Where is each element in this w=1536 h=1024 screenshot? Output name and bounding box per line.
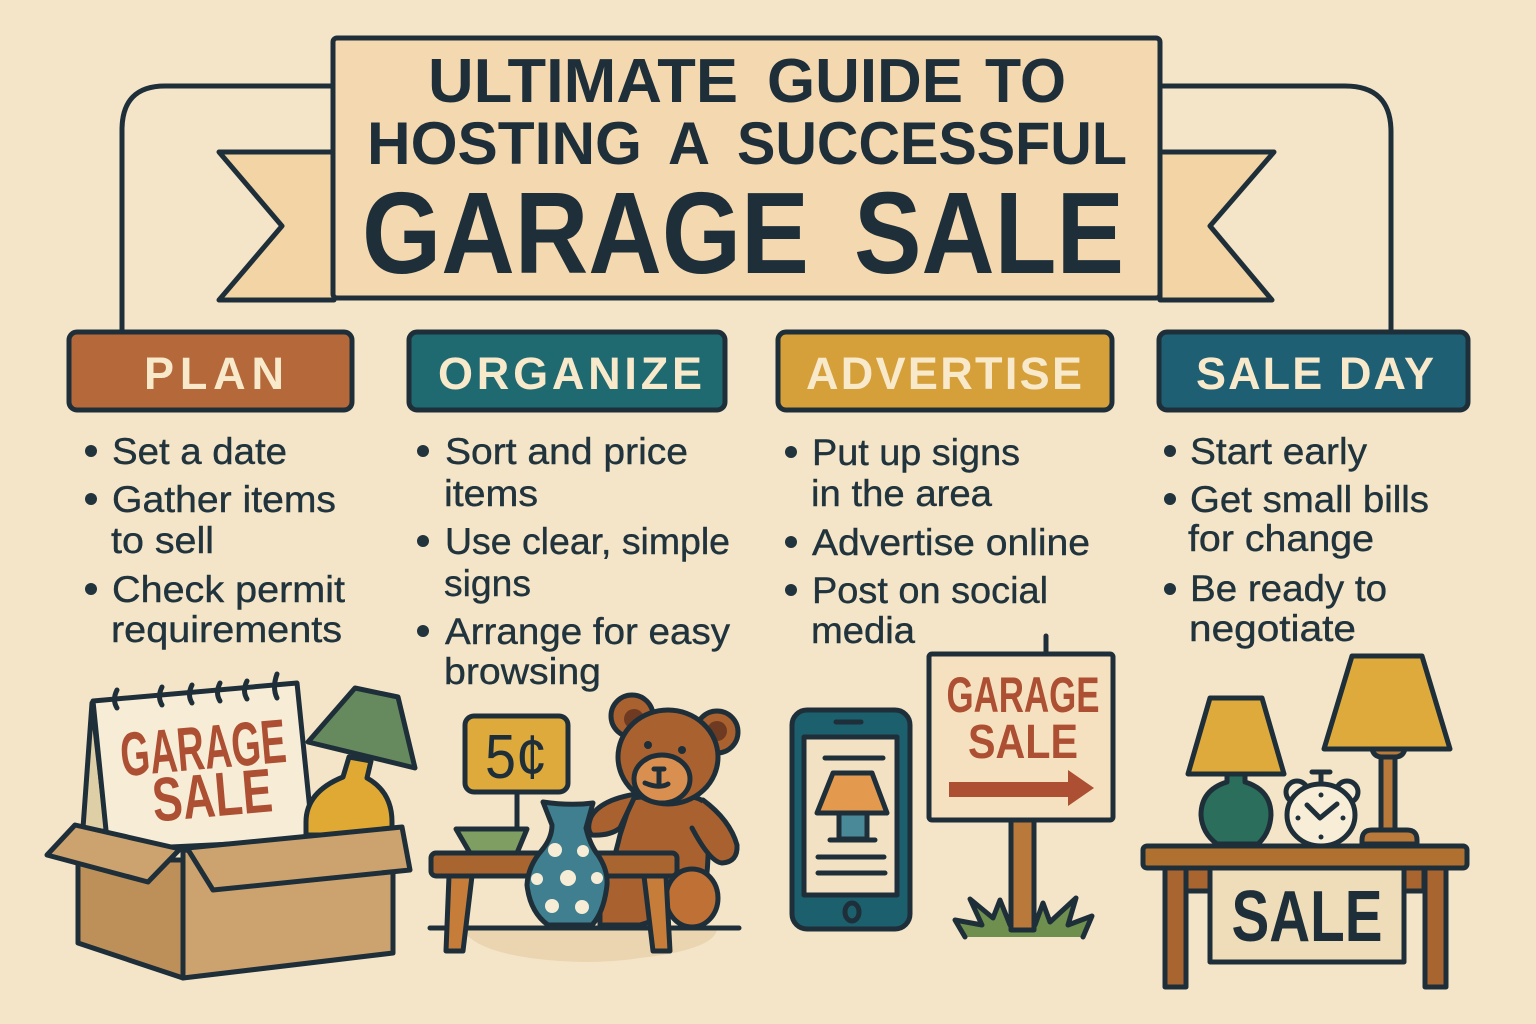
title line 2 [367, 110, 1127, 177]
illustration: teddy bear, vase and table [430, 695, 739, 962]
illustration: lamps, clock and sale table: SALE [1232, 877, 1382, 957]
bear head [618, 710, 718, 804]
heading: Sale Day: SALE DAY [1196, 348, 1434, 399]
text block: Sale Day bullets: Be ready to [1190, 568, 1387, 609]
title line 3: SALE [854, 168, 1124, 298]
bear left ear [611, 695, 653, 737]
bear face [644, 741, 686, 786]
sign arrow [949, 770, 1094, 806]
sign text: GARAGE [946, 667, 1100, 723]
connector: right line from banner to Sale Day [1160, 86, 1391, 332]
text block: Sale Day bullets: for change [1188, 518, 1374, 559]
table legs [446, 876, 670, 951]
title line 1: GUIDE [767, 47, 963, 116]
text block: Plan bullets: to sell [111, 520, 214, 561]
table apron [1186, 866, 1424, 891]
text block: Organize bullets: Arrange for easy [445, 611, 731, 652]
text block: Plan bullets: Check permit [112, 569, 346, 610]
sign text: SALE [968, 716, 1078, 769]
illustration: lamps, clock and sale table [1143, 656, 1467, 987]
text block: Advertise bullets: media [811, 610, 915, 651]
text block: Organize bullets [417, 431, 731, 692]
lamp shade [308, 688, 415, 768]
text block: Advertise bullets: Put up signs [812, 432, 1020, 473]
text block: Plan bullets: Set a date [112, 431, 287, 472]
heading: Organize: ORGANIZE [438, 348, 702, 399]
text block: Sale Day bullets: Start early [1190, 431, 1368, 472]
calendar text: GARAGE [117, 707, 289, 790]
text block: Organize bullets: items [444, 473, 538, 514]
calendar text [117, 707, 293, 838]
heading: Advertise [778, 332, 1112, 410]
box left flap [47, 825, 180, 882]
text block: Organize bullets: signs [444, 563, 531, 604]
title line 1: TO [985, 47, 1066, 116]
bear muzzle [634, 755, 690, 803]
text block: Sale Day bullets: Get small bills [1190, 479, 1429, 520]
box front [183, 850, 393, 978]
box right flap [187, 827, 410, 890]
calendar rings [114, 674, 277, 708]
small lamp base [1201, 774, 1271, 844]
ground shadow [463, 930, 717, 962]
lamp base [306, 757, 392, 835]
heading: Advertise: ADVERTISE [806, 348, 1082, 399]
connector: left line from banner to Plan [122, 86, 333, 332]
clock [1286, 772, 1358, 846]
phone speaker [836, 720, 861, 724]
vase [527, 802, 607, 925]
table top [1143, 846, 1467, 868]
text block: Plan bullets: Gather items [112, 479, 336, 520]
grass [955, 898, 1092, 937]
bear body [600, 795, 708, 925]
sign text [946, 667, 1100, 769]
text block: Sale Day bullets: negotiate [1189, 608, 1356, 649]
bear foot [666, 869, 718, 927]
illustration: phone [792, 710, 910, 929]
title line 1: ULTIMATE [428, 47, 738, 116]
table top [431, 853, 677, 876]
illustration: garage sale yard sign [929, 636, 1113, 937]
phone lamp icon [817, 773, 887, 840]
phone button [845, 903, 859, 921]
text block: Plan bullets [85, 431, 346, 650]
heading: Plan: PLAN [144, 348, 284, 399]
small lamp shade [1188, 698, 1284, 774]
floor line [430, 926, 739, 930]
title line 1 [428, 47, 1066, 116]
title panel [333, 38, 1160, 298]
title line 2: A [668, 110, 710, 177]
text block: Organize bullets: browsing [444, 651, 601, 692]
title line 3: GARAGE [362, 168, 809, 298]
table legs [1165, 867, 1446, 987]
heading: Organize [409, 332, 725, 410]
bear right arm [692, 800, 737, 863]
heading: Plan [69, 332, 352, 410]
calendar text: SALE [150, 756, 275, 836]
ribbon: right tail [1160, 152, 1274, 300]
title line 2: SUCCESSFUL [737, 110, 1127, 177]
ribbon: left tail [219, 152, 334, 300]
sign top post [1044, 636, 1048, 654]
sign board [929, 654, 1113, 820]
calendar page [93, 683, 313, 850]
bear left arm [589, 794, 636, 835]
text block: Advertise bullets: Advertise online [812, 522, 1090, 563]
illustration: calendar, lamp and box [47, 674, 415, 978]
calendar back [83, 703, 107, 832]
text block: Plan bullets: requirements [111, 609, 342, 650]
text block: Advertise bullets [785, 432, 1090, 651]
text block: Advertise bullets: Post on social [812, 570, 1048, 611]
sign post [1011, 820, 1034, 930]
phone screen [804, 737, 897, 895]
price sign post [514, 790, 520, 830]
title line 3 [362, 168, 1124, 298]
illustration: teddy bear, vase and table: 5¢ [485, 723, 547, 792]
tall lamp post [1362, 749, 1417, 844]
bowl [456, 829, 527, 853]
bear right ear [696, 711, 738, 753]
text block: Advertise bullets: in the area [811, 473, 992, 514]
sale placard [1210, 868, 1404, 962]
price sign [465, 716, 568, 792]
text block: Organize bullets: Use clear, simple [445, 521, 730, 562]
vase dots [531, 843, 603, 914]
tall lamp shade [1324, 656, 1450, 749]
text block: Organize bullets: Sort and price [445, 431, 688, 472]
title line 2: HOSTING [367, 110, 642, 177]
box left side [78, 860, 183, 978]
text block: Sale Day bullets [1164, 431, 1429, 649]
phone lines [818, 758, 885, 873]
heading: Sale Day [1159, 332, 1468, 410]
